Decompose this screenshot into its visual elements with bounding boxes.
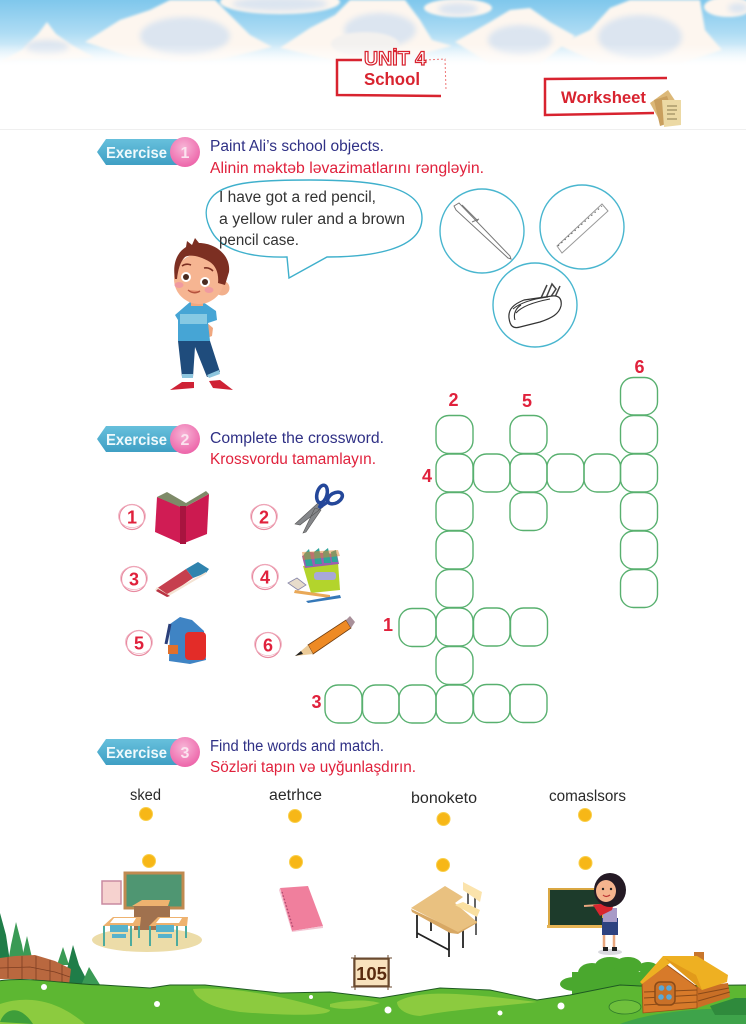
scrambled words — [130, 787, 626, 807]
worksheet label: Worksheet — [561, 88, 646, 107]
green hills — [0, 979, 746, 1024]
icon: worksheet papers — [650, 90, 681, 127]
page number plate — [351, 955, 392, 990]
crossword numbers: 1 — [383, 615, 393, 635]
crossword numbers: 2 — [448, 390, 459, 410]
clue 2 number: 2 — [259, 508, 269, 528]
icon: eraser — [155, 562, 209, 597]
clue 3 number: 3 — [129, 570, 139, 590]
scrambled words: comaslsors — [549, 788, 626, 805]
clue 1 number — [118, 504, 146, 530]
circle: ruler — [540, 185, 624, 269]
clue 6 number — [254, 632, 282, 658]
exercise 2 instruction: Krossvordu tamamlayın. — [210, 451, 376, 468]
crossword numbers: 6 — [634, 357, 645, 377]
worksheet box — [545, 78, 667, 115]
landscape background — [0, 913, 746, 1024]
clue 6 number: 6 — [263, 636, 273, 656]
exercise 3 instruction: Find the words and match. — [210, 738, 384, 755]
exercise 2 instruction: Complete the crossword. — [210, 430, 384, 447]
scrambled words: aetrhce — [269, 787, 322, 804]
exercise 1 badge — [97, 137, 200, 167]
exercise 1 badge: Exercise — [106, 145, 167, 162]
exercise 2 badge: Exercise — [106, 432, 167, 449]
matching dots — [140, 808, 592, 872]
scrambled words: bonoketo — [411, 790, 477, 807]
picture: teacher at board — [547, 873, 626, 955]
exercise 1 instruction: Alinin məktəb ləvazimatlarını rəngləyin. — [210, 160, 484, 177]
crossword numbers: 4 — [422, 466, 432, 486]
scrambled words: sked — [130, 787, 161, 804]
page number plate: 105 — [356, 963, 387, 984]
exercise 2 instruction — [210, 430, 384, 468]
speech bubble: pencil case. — [219, 232, 299, 249]
speech bubble: I have got a red pencil, — [219, 189, 376, 206]
circle: pen — [440, 189, 524, 273]
school title: School — [364, 69, 420, 89]
exercise 2 badge: 2 — [181, 432, 190, 449]
wooden fence — [0, 955, 71, 985]
crossword numbers — [311, 357, 645, 712]
crossword numbers: 3 — [311, 692, 322, 712]
sky with clouds — [0, 0, 746, 68]
exercise 1 instruction — [210, 138, 484, 177]
crossword numbers: 5 — [522, 391, 532, 411]
clue 5 number: 5 — [134, 634, 144, 654]
bushes — [560, 957, 658, 994]
circle: pencil case — [493, 263, 577, 347]
exercise 3 badge: Exercise — [106, 745, 167, 762]
speech bubble — [206, 180, 422, 278]
exercise 3 instruction: Sözləri tapın və uyğunlaşdırın. — [210, 759, 416, 776]
picture: classroom — [92, 873, 202, 952]
clue 5 number — [126, 630, 152, 656]
exercise 3 badge — [97, 737, 200, 767]
clue 1 number: 1 — [127, 508, 137, 528]
exercise 3 instruction — [210, 738, 416, 776]
clue 3 number — [120, 566, 148, 592]
icon: red book — [155, 491, 209, 544]
picture: notebook — [279, 886, 323, 932]
trees — [0, 913, 102, 990]
icon: crayons box — [288, 548, 341, 603]
unit heading box — [337, 49, 446, 96]
icon: pencil — [295, 616, 355, 656]
clue 4 number: 4 — [260, 568, 270, 588]
picture: desk and chair — [411, 882, 482, 957]
exercise 1 instruction: Paint Ali’s school objects. — [210, 138, 384, 155]
exercise 1 badge: 1 — [181, 145, 190, 162]
icon: backpack — [166, 617, 206, 664]
unit label: UNİT 4 — [364, 49, 426, 70]
clue 2 number — [250, 504, 278, 530]
clue 4 number — [252, 564, 278, 590]
exercise 3 badge: 3 — [181, 745, 190, 762]
exercise 2 badge — [97, 424, 200, 454]
speech bubble: a yellow ruler and a brown — [219, 211, 405, 228]
crossword grid — [325, 378, 658, 723]
boy character — [170, 238, 233, 390]
icon: scissors — [295, 484, 344, 533]
flowers — [41, 984, 564, 1016]
house — [640, 952, 730, 1013]
